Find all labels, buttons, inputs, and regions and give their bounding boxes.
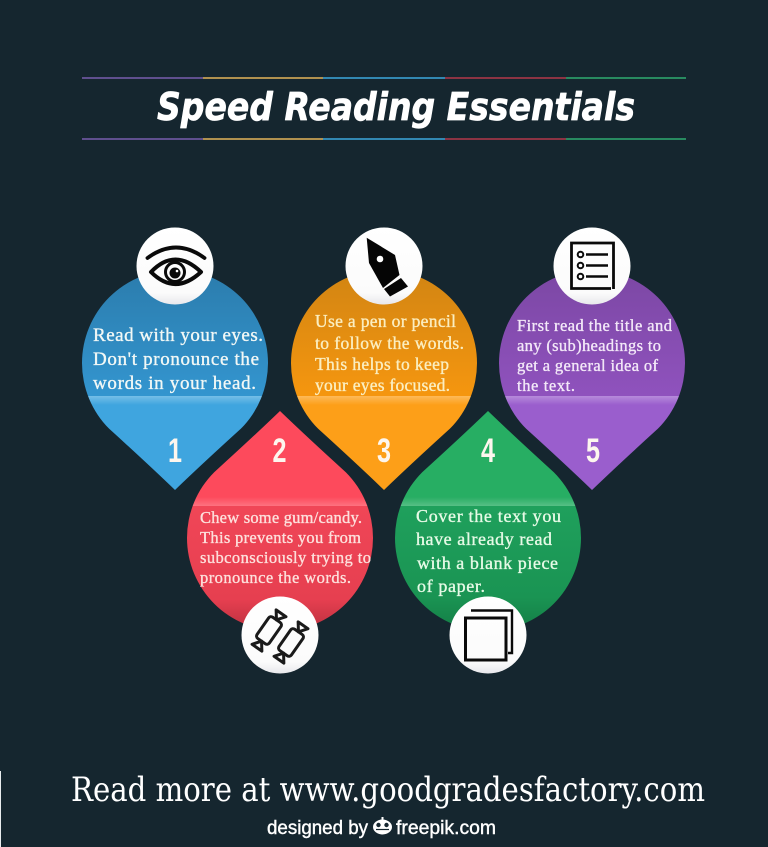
step 2 text: This prevents you from — [200, 528, 361, 547]
footer: credit: designed by — [267, 818, 368, 839]
icon: candies — [242, 596, 318, 674]
number 5: 5 — [586, 432, 600, 470]
panel: step 3 orange drop — [291, 278, 477, 490]
number 2: 2 — [272, 432, 286, 470]
number 3: 3 — [377, 432, 391, 470]
step 1 text: Don't pronounce the — [93, 349, 259, 370]
panel: step 1 blue drop — [82, 278, 268, 490]
step 4 text: of paper. — [417, 576, 485, 596]
step 5 text: get a general idea of — [517, 356, 658, 375]
icon: pen nib — [346, 228, 422, 304]
footer: credit: freepik.com — [396, 818, 496, 839]
step 2 text: pronounce the words. — [200, 568, 351, 587]
panel: step 2 red drop — [187, 411, 373, 624]
icon: eye — [136, 228, 214, 304]
step 5 text: the text. — [517, 376, 575, 395]
footer: credit — [267, 817, 496, 839]
icon: paper sheets — [450, 596, 526, 674]
step 3 text: Use a pen or pencil — [315, 311, 456, 331]
step 3 text: your eyes focused. — [315, 375, 450, 395]
icon: checklist — [554, 228, 630, 304]
step 5 text: First read the title and — [517, 316, 673, 335]
step 4 text: have already read — [416, 529, 552, 549]
step 1 text: words in your head. — [93, 373, 256, 394]
step 5 text: any (sub)headings to — [517, 336, 661, 355]
step 2 text: Chew some gum/candy. — [200, 508, 362, 527]
panel: step 5 purple drop — [499, 278, 685, 490]
number 4: 4 — [481, 432, 495, 470]
step 4 text: Cover the text you — [416, 506, 561, 526]
left edge line — [0, 771, 1, 847]
icon: freepik mascot — [373, 817, 392, 834]
step 3 text: to follow the words. — [315, 333, 464, 353]
step 4 text: with a blank piece — [417, 553, 558, 573]
step 2 text: subconsciously trying to — [200, 548, 371, 567]
number 1: 1 — [168, 432, 182, 470]
step 1 text: Read with your eyes. — [93, 325, 263, 346]
panel: step 4 green drop — [395, 411, 581, 624]
title: Speed Reading Essentials — [157, 85, 635, 129]
step 3 text: This helps to keep — [315, 354, 449, 374]
